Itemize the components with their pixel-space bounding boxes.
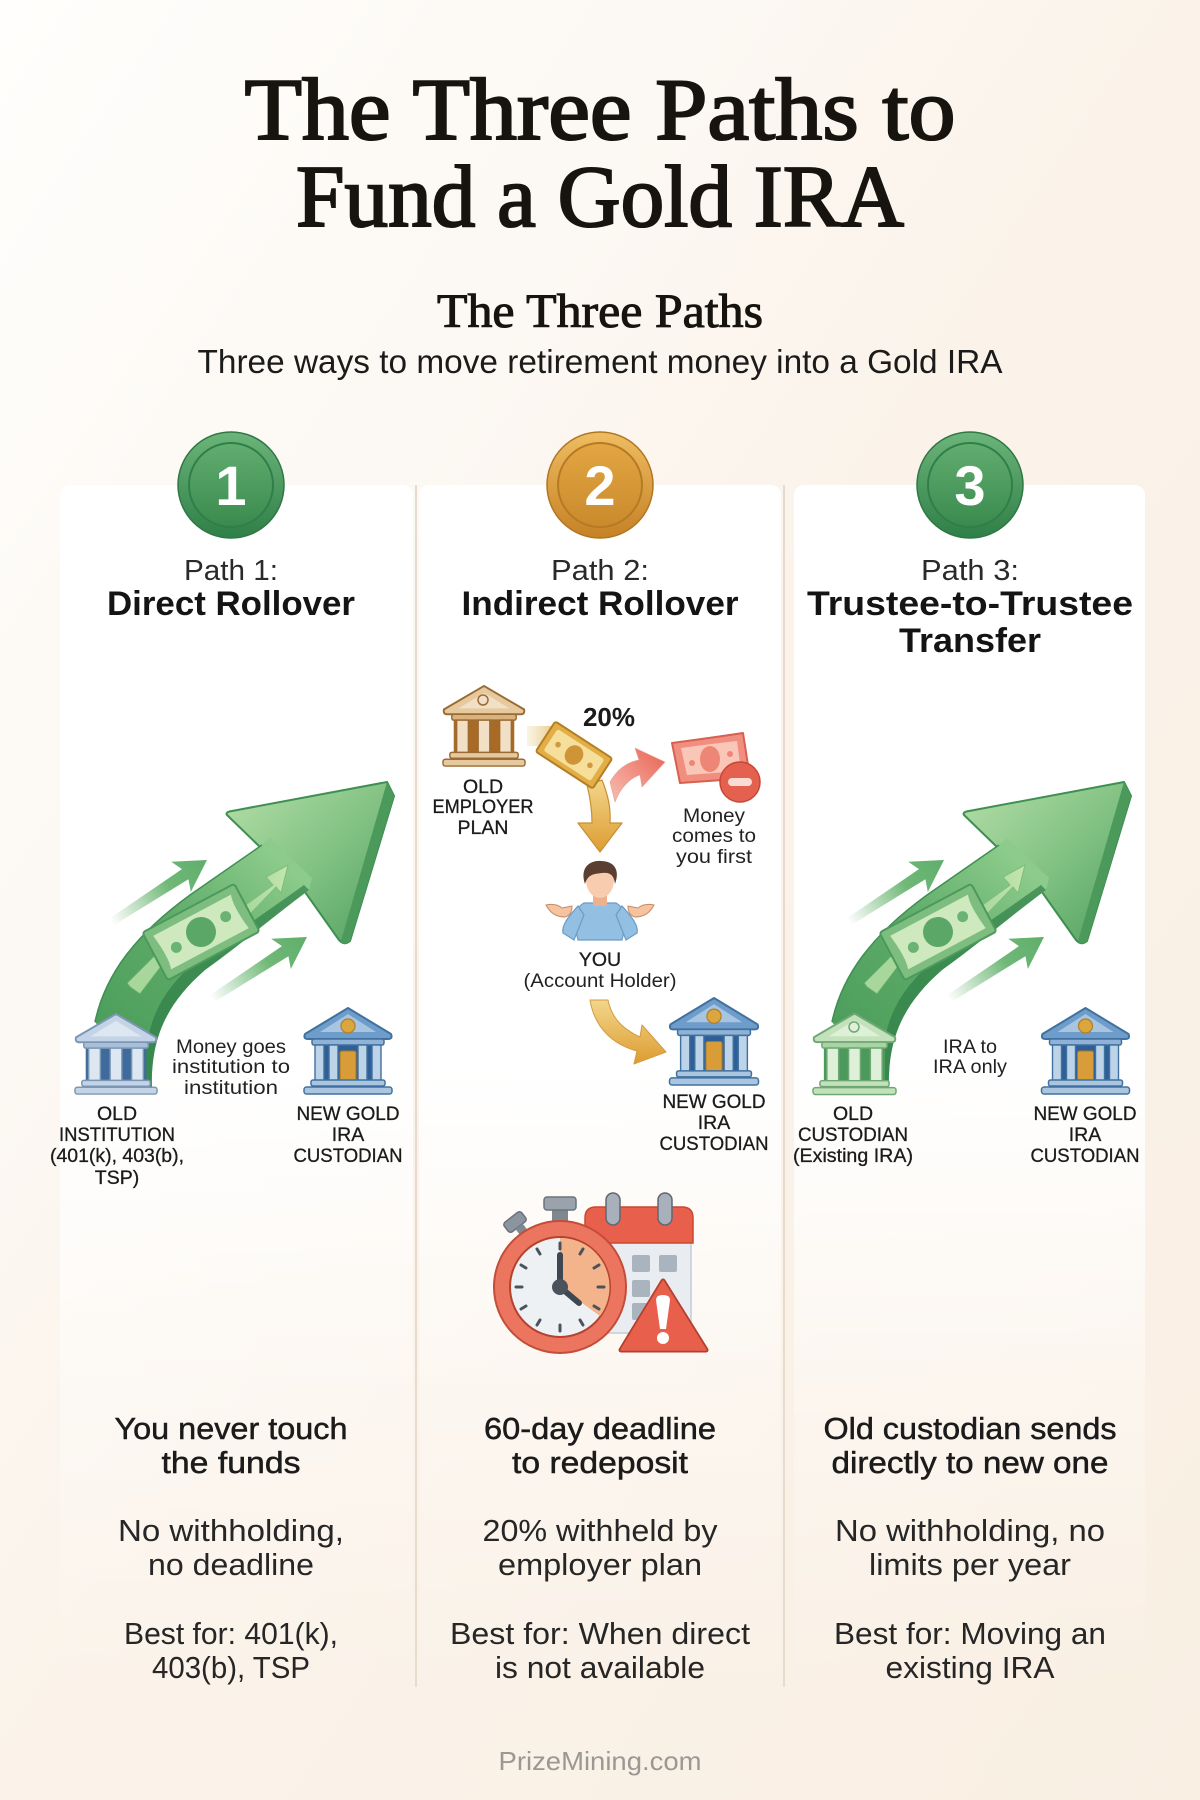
summary text 2: Best for: When direct bbox=[450, 1616, 750, 1651]
summary text 1: Best for: 401(k), bbox=[124, 1616, 338, 1651]
note: ira to ira only: IRA only bbox=[933, 1056, 1007, 1078]
path 2 heading: Indirect Rollover bbox=[462, 585, 738, 623]
note: money goes institution to institution: institution to bbox=[172, 1056, 290, 1078]
note: money comes to you first: you first bbox=[676, 846, 753, 868]
panel background 2 bbox=[419, 485, 781, 1690]
label: new gold ira custodian: NEW GOLD bbox=[296, 1103, 400, 1125]
badge 3: 3 bbox=[954, 454, 986, 517]
summary text 1 bbox=[114, 1411, 348, 1685]
label: new gold ira custodian bbox=[294, 1103, 402, 1167]
arrow: red to withheld money bbox=[610, 748, 665, 802]
arrow: money moving from old institution to new custodian bbox=[95, 782, 394, 1092]
warning triangle bbox=[621, 1281, 706, 1350]
note: money goes institution to institution bbox=[172, 1036, 290, 1099]
label: old employer plan: PLAN bbox=[458, 817, 508, 839]
icon: red bill with minus bbox=[672, 733, 760, 802]
icon: new gold custodian bank bbox=[670, 998, 758, 1085]
label: new gold ira custodian: NEW GOLD bbox=[1034, 1103, 1136, 1125]
label: old custodian: CUSTODIAN bbox=[798, 1124, 908, 1146]
summary text 2 bbox=[450, 1411, 750, 1685]
icon: person shrugging bbox=[546, 861, 654, 940]
title bbox=[244, 62, 956, 246]
label: new gold ira custodian bbox=[660, 1091, 768, 1155]
note: ira to ira only: IRA to bbox=[943, 1036, 997, 1058]
badge 3 bbox=[917, 432, 1023, 538]
section heading: The Three Paths bbox=[437, 285, 763, 338]
summary text 2: is not available bbox=[495, 1650, 705, 1685]
note: money goes institution to institution: Money goes bbox=[176, 1036, 286, 1058]
section heading bbox=[198, 285, 1002, 380]
summary text 2: to redeposit bbox=[512, 1445, 688, 1480]
summary text 3: existing IRA bbox=[886, 1650, 1055, 1685]
note: money comes to you first bbox=[672, 805, 756, 868]
note: money comes to you first: Money bbox=[683, 805, 745, 827]
calendar bbox=[585, 1193, 693, 1333]
label: old institution: OLD bbox=[97, 1103, 137, 1125]
note: money comes to you first: comes to bbox=[672, 825, 756, 847]
summary text 3: directly to new one bbox=[832, 1445, 1108, 1480]
label: you account holder: (Account Holder) bbox=[524, 970, 676, 992]
path 1 heading: Direct Rollover bbox=[107, 585, 355, 623]
badge 1: 1 bbox=[215, 454, 247, 517]
path 3 heading: Path 3: bbox=[921, 555, 1019, 587]
title: The Three Paths to bbox=[244, 62, 956, 159]
label: new gold ira custodian bbox=[1030, 1103, 1140, 1167]
icon: new gold custodian bank bbox=[1042, 1008, 1130, 1094]
panel: direct rollover bbox=[50, 432, 413, 1690]
label: new gold ira custodian: CUSTODIAN bbox=[1030, 1145, 1140, 1167]
path 2 heading: Path 2: bbox=[551, 555, 649, 587]
label: old custodian: OLD bbox=[833, 1103, 873, 1125]
summary text 3 bbox=[824, 1411, 1116, 1685]
badge 1 bbox=[178, 432, 284, 538]
summary text 2: 60-day deadline bbox=[484, 1411, 716, 1446]
panel background 1 bbox=[60, 485, 413, 1690]
summary text 1: No withholding, bbox=[118, 1513, 344, 1548]
section heading: Three ways to move retirement money into a Gold IRA bbox=[198, 343, 1002, 380]
label: old employer plan: OLD bbox=[463, 776, 503, 798]
icon: stopwatch calendar warning bbox=[494, 1193, 706, 1353]
panel background 3 bbox=[794, 485, 1145, 1690]
note: ira to ira only bbox=[933, 1036, 1007, 1078]
panel: indirect rollover bbox=[419, 432, 781, 1690]
label: new gold ira custodian: IRA bbox=[1069, 1124, 1101, 1146]
label: you account holder bbox=[524, 949, 676, 992]
path 2 heading bbox=[462, 555, 738, 623]
summary text 1: You never touch bbox=[114, 1411, 348, 1446]
label: new gold ira custodian: CUSTODIAN bbox=[294, 1145, 402, 1167]
label: 20 percent: 20% bbox=[583, 702, 635, 732]
footer: PrizeMining.com bbox=[498, 1746, 702, 1776]
badge 2: 2 bbox=[584, 454, 616, 517]
label: new gold ira custodian: CUSTODIAN bbox=[660, 1133, 768, 1155]
summary text 1: the funds bbox=[162, 1445, 300, 1480]
label: old custodian bbox=[793, 1103, 913, 1167]
arrow: money moving from old custodian to new custodian bbox=[832, 782, 1131, 1092]
label: old employer plan bbox=[432, 776, 534, 839]
summary text 2: 20% withheld by bbox=[482, 1513, 718, 1548]
label: new gold ira custodian: IRA bbox=[332, 1124, 364, 1146]
path 3 heading: Transfer bbox=[899, 622, 1041, 660]
stopwatch bbox=[494, 1197, 626, 1353]
summary text 3: limits per year bbox=[869, 1547, 1071, 1582]
label: new gold ira custodian: IRA bbox=[698, 1112, 730, 1134]
icon: old employer plan bank bbox=[443, 686, 525, 766]
path 3 heading bbox=[807, 555, 1133, 660]
label: old institution: INSTITUTION bbox=[59, 1124, 175, 1146]
label: old institution bbox=[50, 1103, 184, 1189]
summary text 3: Best for: Moving an bbox=[834, 1616, 1106, 1651]
summary text 2: employer plan bbox=[498, 1547, 702, 1582]
icon: old institution bank bbox=[75, 1014, 157, 1094]
summary text 3: No withholding, no bbox=[835, 1513, 1105, 1548]
panel: trustee to trustee transfer bbox=[793, 432, 1145, 1690]
summary text 3: Old custodian sends bbox=[824, 1411, 1116, 1446]
badge 2 bbox=[547, 432, 653, 538]
label: old institution: TSP) bbox=[95, 1167, 139, 1189]
icon: gold bill with motion trail bbox=[527, 721, 612, 789]
note: money goes institution to institution: institution bbox=[184, 1077, 278, 1099]
summary text 1: 403(b), TSP bbox=[152, 1650, 310, 1685]
label: old institution: (401(k), 403(b), bbox=[50, 1145, 184, 1167]
path 3 heading: Trustee-to-Trustee bbox=[807, 585, 1133, 623]
label: old employer plan: EMPLOYER bbox=[432, 796, 534, 818]
label: new gold ira custodian: NEW GOLD bbox=[662, 1091, 766, 1113]
label: old custodian: (Existing IRA) bbox=[793, 1145, 913, 1167]
path 1 heading bbox=[107, 555, 355, 623]
icon: old custodian bank bbox=[813, 1013, 896, 1095]
arrow: gold to new custodian bbox=[590, 1000, 666, 1064]
path 1 heading: Path 1: bbox=[184, 555, 278, 587]
summary text 1: no deadline bbox=[148, 1547, 314, 1582]
arrow: gold down to you bbox=[578, 780, 622, 852]
icon: new gold custodian bank bbox=[304, 1008, 392, 1094]
title: Fund a Gold IRA bbox=[296, 149, 904, 246]
label: you account holder: YOU bbox=[579, 949, 621, 971]
